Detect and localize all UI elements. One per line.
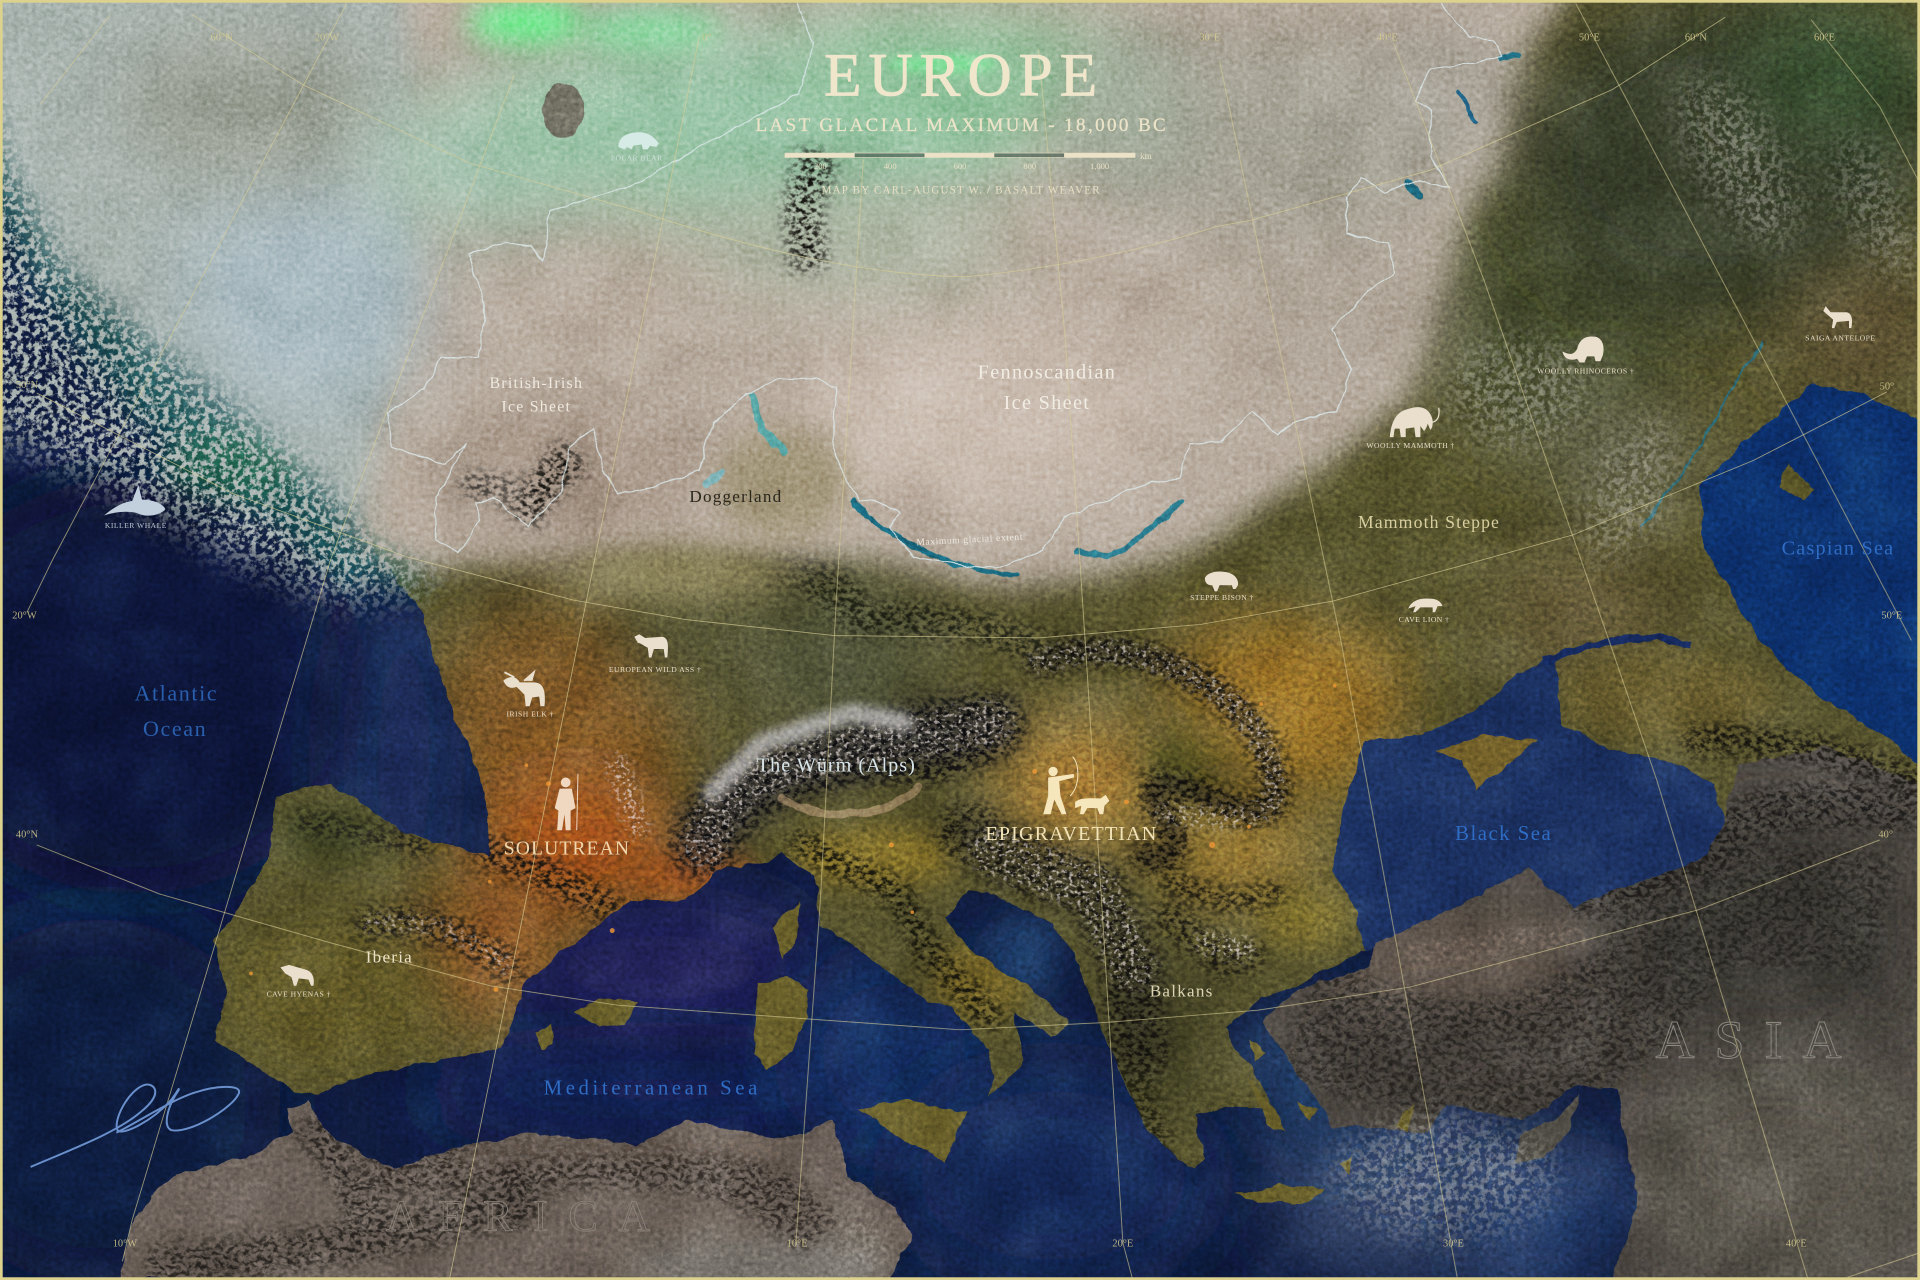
scale bar: 1,000 — [1090, 161, 1109, 171]
mountain ranges — [306, 567, 1920, 1139]
cloud wisps — [835, 53, 1920, 1276]
graticule labels: 60°N — [1685, 32, 1707, 43]
graticule labels: 20°W — [315, 32, 339, 43]
graticule labels: 40°E — [1786, 1239, 1807, 1250]
icon: wolf — [1075, 795, 1109, 814]
label: Balkans: Balkans — [1150, 982, 1214, 1001]
region labels — [134, 361, 1894, 1241]
label: Atlantic Ocean — [134, 680, 218, 741]
icon: solutrean hunter — [555, 774, 578, 830]
label: Black Sea: Black Sea — [1455, 821, 1552, 845]
label: Mammoth Steppe: Mammoth Steppe — [1358, 512, 1500, 532]
icon: steppe bison: STEPPE BISON † — [1190, 593, 1254, 602]
graticule labels: 0° — [702, 32, 711, 43]
icon: polar bear — [611, 132, 663, 162]
label: maximum glacial extent: Maximum glacial extent — [916, 532, 1023, 548]
graticule labels: 20°E — [1112, 1239, 1133, 1250]
map credit: MAP BY CARL-AUGUST W. / BASALT WEAVER — [822, 184, 1100, 196]
artist signature — [31, 1085, 239, 1167]
graticule labels: 60°E — [1814, 32, 1835, 43]
label: Solutrean: SOLUTREAN — [504, 839, 630, 860]
label: British-Irish Ice Sheet — [489, 375, 583, 415]
scale bar: 800 — [1023, 161, 1036, 171]
ice sheet colour zones — [110, 0, 1518, 602]
title: EUROPE — [824, 42, 1097, 110]
snow caps — [367, 651, 1275, 967]
animals and figures — [104, 132, 1876, 999]
label: Caspian Sea: Caspian Sea — [1782, 538, 1894, 560]
icon: european wild ass — [609, 634, 701, 674]
scale bar: 600 — [954, 161, 966, 171]
graticule labels: 40°E — [1377, 32, 1398, 43]
label: Doggerland: Doggerland — [689, 487, 782, 506]
label: Epigravettian: EPIGRAVETTIAN — [985, 823, 1157, 845]
label: Africa: AFRICA — [386, 1192, 650, 1241]
icon: woolly rhinoceros — [1537, 336, 1634, 375]
label: British-Irish Ice Sheet: Ice Sheet — [501, 398, 571, 415]
asia landmass — [1262, 745, 1918, 1278]
label: British-Irish Ice Sheet: British-Irish — [489, 375, 583, 392]
graticule labels: 30°E — [1443, 1239, 1464, 1250]
icon: saiga antelope — [1805, 306, 1876, 342]
icon: irish elk — [504, 672, 554, 718]
cyprus island — [1513, 1096, 1580, 1163]
graticule labels: 50°E — [1881, 610, 1902, 621]
scale bar: 200 — [814, 161, 827, 171]
graticule labels: 10°E — [787, 1239, 808, 1250]
label: Iberia: Iberia — [366, 947, 413, 966]
icon: killer whale: KILLER WHALE — [105, 521, 167, 530]
ice sheets — [361, 0, 1580, 590]
graticule labels: 10°W — [113, 1239, 137, 1250]
graticule labels: 60°N — [211, 32, 233, 43]
label: The Würm (Alps): The Würm (Alps) — [757, 754, 916, 776]
label: Atlantic Ocean: Atlantic — [134, 680, 218, 705]
rock island and norway peaks — [463, 83, 818, 520]
label: Atlantic Ocean: Ocean — [143, 716, 207, 741]
graticule labels: 40°N — [16, 830, 38, 841]
maximum glacial extent line — [388, 0, 1502, 569]
scale bar: 400 — [884, 161, 897, 171]
graticule labels: 50°N — [16, 380, 38, 391]
africa landmass — [120, 1100, 912, 1278]
title block — [756, 42, 1166, 196]
graticule labels: 30°E — [1199, 32, 1220, 43]
icon: epigravettian archer — [1043, 757, 1078, 814]
icon: european wild ass: EUROPEAN WILD ASS † — [609, 665, 701, 674]
scale bar: km — [1140, 151, 1152, 161]
icon: irish elk: IRISH ELK † — [506, 709, 554, 718]
graticule labels: 40° — [1878, 830, 1893, 841]
label: Fennoscandian Ice Sheet: Fennoscandian — [978, 361, 1116, 383]
graticule labels: 50° — [1880, 381, 1894, 392]
icon: cave lion: CAVE LION † — [1399, 615, 1449, 624]
icon: cave lion — [1399, 598, 1449, 624]
label: Fennoscandian Ice Sheet: Ice Sheet — [1004, 392, 1090, 414]
glowing settlement dots — [249, 684, 1337, 992]
icon: killer whale — [104, 485, 167, 530]
label: Mediterranean Sea: Mediterranean Sea — [544, 1076, 759, 1100]
black sea, azov and caspian — [1332, 383, 1920, 949]
glacial lakes — [708, 55, 1763, 576]
icon: steppe bison — [1190, 572, 1254, 602]
sea ice — [0, 0, 490, 600]
subtitle: LAST GLACIAL MAXIMUM - 18,000 BC — [756, 115, 1166, 136]
icon: polar bear: POLAR BEAR — [611, 153, 663, 162]
graticule labels: 50°E — [1579, 32, 1600, 43]
icon: woolly mammoth — [1366, 407, 1455, 450]
atlantic and mediterranean sea tones — [0, 478, 1641, 1280]
icon: woolly rhinoceros: WOOLLY RHINOCEROS † — [1537, 366, 1634, 375]
scale bar — [785, 151, 1152, 171]
mediterranean and aegean islands — [536, 902, 1414, 1202]
graticule labels: 20°W — [12, 610, 37, 621]
icon: cave hyena: CAVE HYENAS † — [267, 990, 331, 999]
dark mountain shading — [306, 567, 1920, 1139]
icon: cave hyena — [267, 965, 331, 999]
icon: saiga antelope: SAIGA ANTELOPE — [1805, 333, 1876, 342]
label: Fennoscandian Ice Sheet — [978, 361, 1116, 414]
label: Asia: ASIA — [1656, 1010, 1842, 1070]
icon: woolly mammoth: WOOLLY MAMMOTH † — [1366, 441, 1455, 450]
